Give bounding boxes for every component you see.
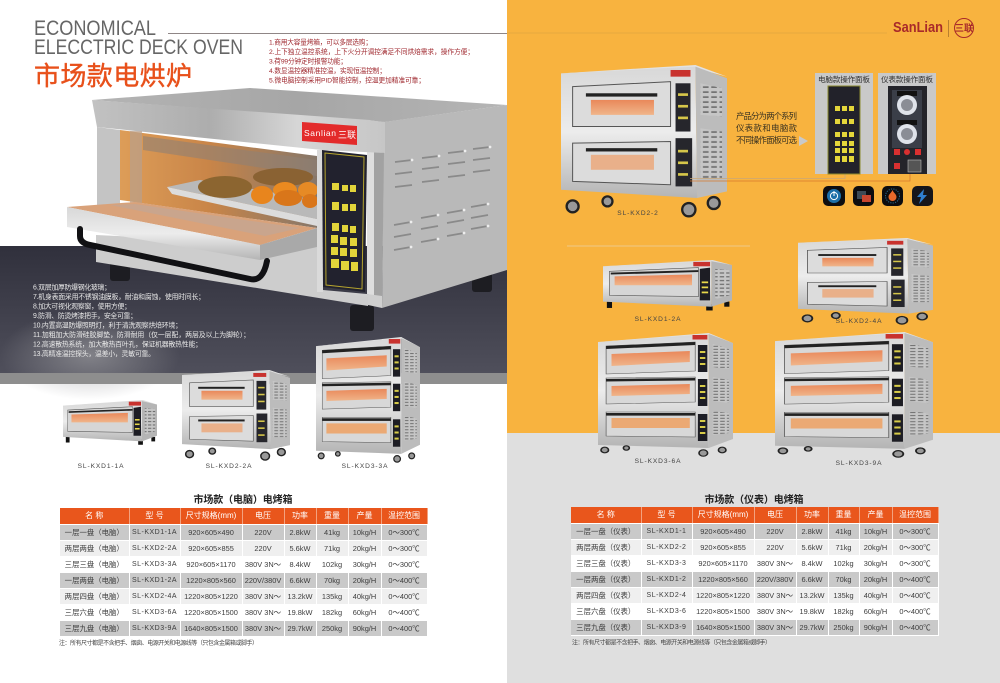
- right spec table: 380V 3N～: [757, 607, 793, 616]
- oven SL-KXD2-2: [561, 65, 727, 216]
- left spec table: SL-KXD1-1A: [132, 529, 177, 536]
- feature list 6-13: 10.内置高温防爆照明灯，利于清洗观察烘焙环境；: [33, 320, 182, 330]
- left spec table: 380V 3N～: [245, 592, 281, 601]
- left spec table: 220V/380V: [245, 576, 281, 585]
- right spec table: 电压: [767, 510, 783, 519]
- left spec table: 19.8kW: [287, 608, 313, 617]
- feature list 6-13: 9.防滑、防烫烤漆把手，安全可靠；: [33, 311, 137, 320]
- left spec table: [60, 508, 428, 636]
- right table title: 市场款（仪表）电烤箱: [704, 493, 804, 506]
- panel description: 产品分为两个系列: [736, 111, 797, 121]
- right spec table: 71kg: [835, 543, 852, 552]
- main oven: [67, 88, 507, 331]
- right spec table: 30kg/H: [864, 559, 887, 568]
- left spec table: 1220×805×1220: [184, 592, 238, 601]
- left model labels: SL-KXD2-2A: [206, 463, 252, 470]
- right spec table: SL-KXD3-3: [647, 560, 686, 567]
- right spec table: 380V 3N～: [757, 559, 793, 568]
- icon: power: [823, 186, 845, 206]
- right spec table: SL-KXD2-4: [647, 592, 686, 599]
- right spec table: 型 号: [657, 510, 676, 519]
- title: [34, 17, 243, 91]
- title: 市场款电烘炉: [34, 61, 192, 91]
- oven cavity: [120, 130, 317, 228]
- left spec table: 功率: [292, 511, 308, 520]
- model label SL-KXD2-2: SL-KXD2-2: [617, 210, 659, 217]
- door: [67, 202, 317, 245]
- left spec table: 产量: [356, 511, 372, 520]
- left spec table: 920×605×1170: [186, 560, 236, 569]
- right spec table: 250kg: [833, 623, 854, 632]
- left spec table: 920×605×490: [188, 528, 234, 537]
- right spec table: 135kg: [833, 591, 854, 600]
- panel: computer controls: 电脑款操作面板: [818, 74, 870, 84]
- left spec table: 380V 3N～: [245, 624, 281, 633]
- feature list 1-5: 3.荷99分钟定时报警功能；: [269, 56, 347, 66]
- right spec table: 20kg/H: [864, 543, 887, 552]
- left spec table: 380V 3N～: [245, 560, 281, 569]
- right spec table: 10kg/H: [864, 527, 887, 536]
- left spec table: 5.6kW: [290, 544, 310, 553]
- feature list 1-5: 2.上下独立温控系统，上下火分开调控满足不同烘焙需求，操作方便；: [269, 47, 474, 56]
- left spec table: 两层四盘（电脑）: [65, 592, 124, 601]
- right spec table: 三层九盘（仪表）: [576, 623, 635, 632]
- left spec table: 0～300℃: [388, 560, 420, 569]
- left spec table: SL-KXD3-6A: [132, 609, 177, 616]
- panel description: 不同操作面板可选: [736, 135, 798, 145]
- left spec table: SL-KXD3-9A: [132, 625, 177, 632]
- right spec table: 1220×805×1500: [696, 607, 750, 616]
- logo: [507, 18, 974, 38]
- door handle: [80, 229, 267, 279]
- left spec table: 0～400℃: [388, 608, 420, 617]
- right model labels: SL-KXD2-4A: [836, 318, 882, 325]
- top surface: [92, 88, 507, 122]
- feature list 6-13: [33, 282, 250, 358]
- right spec table: 重量: [836, 510, 852, 519]
- feature list 6-13: 8.加大可视化观察窗，使用方便；: [33, 302, 131, 310]
- right spec table: 90kg/H: [864, 623, 887, 632]
- left spec table: 10kg/H: [353, 528, 376, 537]
- panel description: 仪表款和电脑款: [736, 123, 798, 133]
- left spec table: 三层六盘（电脑）: [65, 608, 124, 617]
- right spec table: 1220×805×1220: [696, 591, 750, 600]
- legs: [110, 262, 492, 331]
- side vents: [394, 147, 490, 250]
- right spec table: 920×605×490: [700, 527, 746, 536]
- left spec table: 0～400℃: [388, 592, 420, 601]
- oven SL-KXD3-3A: [316, 337, 420, 462]
- right spec table: 三层三盘（仪表）: [576, 559, 635, 568]
- left spec table: 220V: [254, 528, 272, 537]
- left spec table: 1640×805×1500: [184, 624, 238, 633]
- left model labels: [78, 463, 388, 470]
- right spec table: 70kg: [835, 575, 852, 584]
- panel description: [736, 111, 798, 145]
- side panel: [382, 105, 507, 308]
- right spec table: 220V/380V: [757, 575, 793, 584]
- dark showcase band: [0, 246, 507, 400]
- right spec table: 两层四盘（仪表）: [576, 591, 635, 600]
- right spec table: 182kg: [833, 607, 854, 616]
- left spec table: 90kg/H: [353, 624, 376, 633]
- left spec table: 尺寸规格(mm): [186, 511, 236, 520]
- right spec table: 尺寸规格(mm): [698, 510, 748, 519]
- right spec table: 920×605×1170: [698, 559, 748, 568]
- left pillar: [97, 127, 120, 205]
- left spec table: 220V: [254, 544, 272, 553]
- left spec table: 型 号: [145, 511, 164, 520]
- panel: instrument controls: 仪表款操作面板: [881, 74, 933, 84]
- right spec table: 19.8kW: [799, 607, 825, 616]
- feature list 1-5: 5.微电脑控制采用PID智能控制，控温更加精准可靠；: [269, 76, 425, 84]
- right spec table: 6.6kW: [802, 575, 822, 584]
- right spec table: 一层两盘（仪表）: [576, 575, 635, 584]
- left spec table: 名 称: [85, 511, 103, 520]
- title: ELECCTRIC DECK OVEN: [34, 36, 243, 59]
- left spec table: 13.2kW: [287, 592, 313, 601]
- right spec table: SL-KXD2-2: [647, 544, 686, 551]
- left spec table: 温控范围: [388, 511, 420, 520]
- left spec table: 0～400℃: [388, 624, 420, 633]
- left spec table: SL-KXD1-2A: [132, 577, 177, 584]
- left table title: 市场款（电脑）电烤箱: [194, 493, 292, 506]
- oven SL-KXD2-2A: [182, 370, 290, 460]
- right spec table: 920×605×855: [700, 543, 746, 552]
- left spec table: 250kg: [322, 624, 342, 633]
- oven SL-KXD1-1A: [63, 400, 157, 445]
- right model labels: SL-KXD3-9A: [836, 460, 882, 467]
- logo: 三联: [954, 22, 974, 34]
- left spec table: 30kg/H: [353, 560, 376, 569]
- logo: SanLian: [893, 19, 943, 36]
- left spec table: 60kg/H: [353, 608, 376, 617]
- right spec table: 380V 3N～: [757, 591, 793, 600]
- brand plate: [302, 122, 357, 145]
- left spec table: 电压: [255, 511, 271, 520]
- feature list 1-5: 4.数显温控器精准控温，实现恒温控制；: [269, 66, 386, 75]
- left spec table: SL-KXD2-4A: [132, 593, 177, 600]
- right spec table: [571, 507, 939, 636]
- feature list 6-13: 13.高精准温控探头，温差小，灵敏可靠。: [33, 349, 155, 358]
- right spec table: 0～300℃: [899, 527, 931, 536]
- feature list 6-13: 11.加粗加大防滑硅胶脚垫，防滑耐用（仅一层配，两层及以上为脚轮）；: [33, 330, 250, 339]
- feature list 6-13: 12.高速散热系统，加大散热百叶孔，保证机器散热性能；: [33, 340, 202, 348]
- left spec table: 重量: [324, 511, 340, 520]
- left spec table: 0～300℃: [388, 528, 420, 537]
- connector lines: [690, 174, 910, 181]
- left spec table: 一层一盘（电脑）: [65, 528, 124, 537]
- right spec table: 功率: [804, 510, 820, 519]
- right spec table: 一层一盘（仪表）: [576, 527, 635, 536]
- right spec table: 0～400℃: [899, 607, 931, 616]
- right spec table: 三层六盘（仪表）: [576, 607, 635, 616]
- breads: [198, 168, 318, 208]
- icon: lightning: [912, 186, 933, 206]
- left spec table: 380V 3N～: [245, 608, 281, 617]
- feature list 6-13: 7.机身表面采用不锈钢油膜板，耐油和腐蚀，使用时间长；: [33, 292, 205, 301]
- left page background: [0, 0, 507, 683]
- right spec table: 60kg/H: [864, 607, 887, 616]
- left spec table: 920×605×855: [188, 544, 234, 553]
- left spec table: 1220×805×1500: [184, 608, 238, 617]
- right page grey background: [507, 433, 1000, 683]
- brand plate: Sanlian: [304, 128, 336, 138]
- right spec table: 0～300℃: [899, 543, 931, 552]
- right page orange background: [507, 0, 1000, 433]
- baking tray: [167, 180, 317, 219]
- front top band: [92, 100, 385, 153]
- right spec table: 两层两盘（仪表）: [576, 543, 635, 552]
- icon: display: [853, 186, 874, 206]
- left spec table: 2.8kW: [290, 528, 310, 537]
- left spec table: SL-KXD2-2A: [132, 545, 177, 552]
- right spec table: 102kg: [833, 559, 854, 568]
- oven SL-KXD3-9A: [775, 332, 933, 457]
- right spec table: 温控范围: [899, 510, 931, 519]
- left spec table: 71kg: [324, 544, 340, 553]
- lower front body: [96, 235, 368, 306]
- left spec table: 8.4kW: [290, 560, 310, 569]
- right spec table: 220V: [766, 543, 784, 552]
- right spec table: 0～300℃: [899, 559, 931, 568]
- right spec table: 产量: [868, 510, 884, 519]
- left spec table: SL-KXD3-3A: [132, 561, 177, 568]
- right spec table: 13.2kW: [799, 591, 825, 600]
- left spec table: 29.7kW: [287, 624, 313, 633]
- left spec table: 135kg: [322, 592, 342, 601]
- right spec table: 0～400℃: [899, 575, 931, 584]
- right spec table: SL-KXD3-6: [647, 608, 686, 615]
- left spec table: 20kg/H: [353, 576, 376, 585]
- right spec table: 名 称: [597, 510, 615, 519]
- left model labels: SL-KXD1-1A: [78, 463, 124, 470]
- arrow: [799, 136, 808, 146]
- panel: computer controls: [815, 73, 873, 174]
- left spec table: 三层三盘（电脑）: [65, 560, 124, 569]
- left spec table: 两层两盘（电脑）: [65, 544, 124, 553]
- feature list 1-5: [269, 38, 474, 84]
- right spec table: 1640×805×1500: [696, 623, 750, 632]
- feature list 6-13: 6.双层加厚防爆钢化玻璃；: [33, 282, 111, 292]
- left spec table: 0～400℃: [388, 576, 420, 585]
- right spec table: 41kg: [835, 527, 852, 536]
- right spec table: 0～400℃: [899, 623, 931, 632]
- left model labels: SL-KXD3-3A: [342, 463, 388, 470]
- left spec table: 182kg: [322, 608, 342, 617]
- left table note: 注：所有尺寸都是不含把手、烟囱、电源开关和电源线等（只包含金属箱或脚手）: [59, 639, 258, 647]
- right spec table: 220V: [766, 527, 784, 536]
- left spec table: 70kg: [324, 576, 340, 585]
- left spec table: 6.6kW: [290, 576, 310, 585]
- right model labels: SL-KXD3-6A: [635, 458, 681, 465]
- right spec table: 20kg/H: [864, 575, 887, 584]
- right spec table: 8.4kW: [802, 559, 822, 568]
- right model labels: SL-KXD1-2A: [635, 316, 681, 323]
- oven SL-KXD2-4A: [798, 238, 933, 324]
- right spec table: SL-KXD1-1: [647, 528, 686, 535]
- right spec table: 0～400℃: [899, 591, 931, 600]
- right spec table: 380V 3N～: [757, 623, 793, 632]
- divider above ovens: [567, 245, 750, 247]
- right spec table: SL-KXD1-2: [647, 576, 686, 583]
- oven SL-KXD1-2A: [603, 260, 732, 310]
- left spec table: 41kg: [324, 528, 340, 537]
- right spec table: 29.7kW: [799, 623, 825, 632]
- right spec table: 2.8kW: [802, 527, 822, 536]
- left spec table: 20kg/H: [353, 544, 376, 553]
- right table note: 注：所有尺寸都是不含把手、烟囱、电源开关和电源线等（只包含金属箱或脚手）: [572, 638, 771, 646]
- right spec table: 5.6kW: [802, 543, 822, 552]
- panel: instrument controls: [878, 73, 936, 174]
- left spec table: 0～300℃: [388, 544, 420, 553]
- left spec table: 1220×805×560: [186, 576, 236, 585]
- title: ECONOMICAL: [34, 17, 156, 40]
- feature list 1-5: 1.商用大容量烤箱，可以多层选购；: [269, 38, 372, 46]
- right spec table: 1220×805×560: [698, 575, 748, 584]
- right model labels: [635, 316, 882, 467]
- icon: flame: [882, 186, 903, 206]
- brand plate: 三联: [338, 130, 356, 140]
- left spec table: 102kg: [322, 560, 342, 569]
- right spec table: SL-KXD3-9: [647, 624, 686, 631]
- oven SL-KXD3-6A: [598, 333, 733, 456]
- right spec table: 40kg/H: [864, 591, 887, 600]
- control panel: [322, 150, 367, 292]
- left spec table: 三层九盘（电脑）: [65, 624, 124, 633]
- left spec table: 一层两盘（电脑）: [65, 576, 124, 585]
- left spec table: 40kg/H: [353, 592, 376, 601]
